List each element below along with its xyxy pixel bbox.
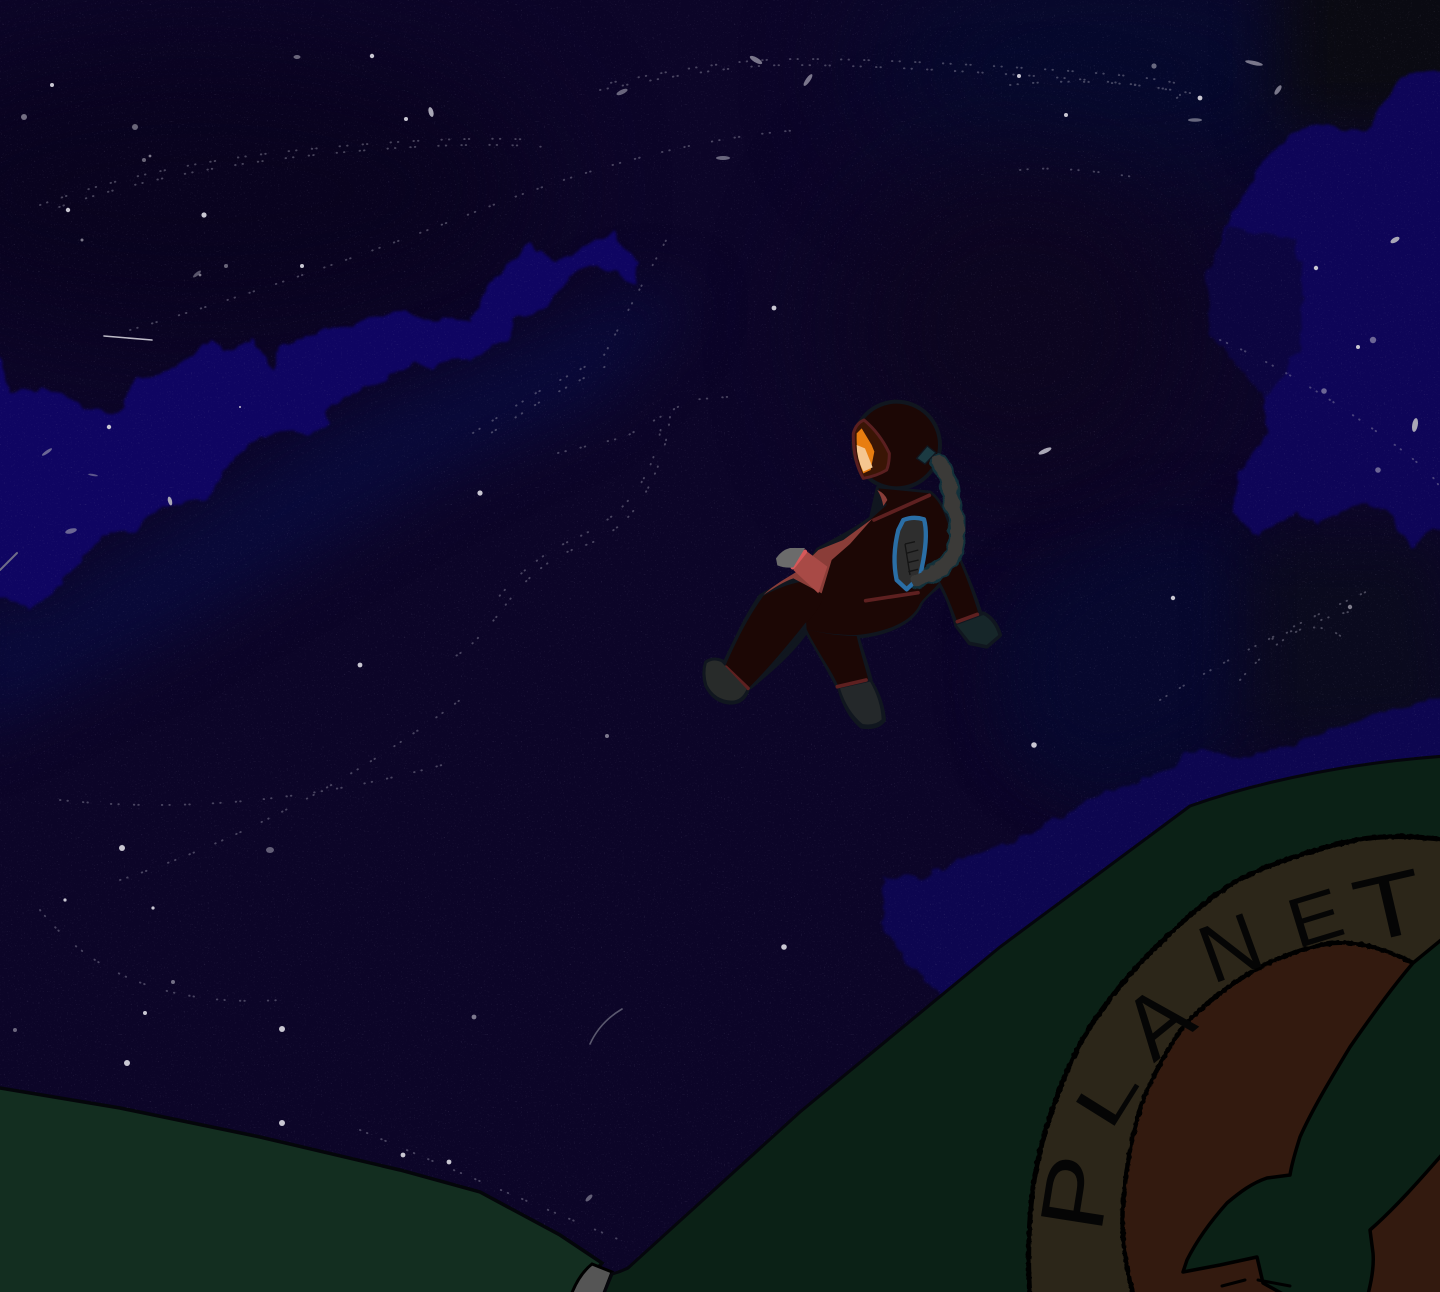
planet sign: lettering PLANET: L	[1059, 1052, 1153, 1141]
nebula band: lower right behind planet	[880, 690, 1440, 1010]
planet sign: lettering PLANET: A	[1103, 964, 1212, 1078]
astronaut: sunlit pink edge of thigh and chest	[763, 518, 873, 595]
astronaut: right glove	[957, 615, 998, 645]
planet sign: continent marks	[1222, 1280, 1290, 1286]
astronaut: hose core	[917, 462, 957, 581]
astronaut: backpack	[895, 518, 926, 589]
astronaut: forearm	[793, 550, 827, 593]
astronaut: front leg	[725, 582, 823, 688]
astronaut: red suit trim	[726, 495, 977, 688]
planet: signpost pole	[570, 1264, 612, 1292]
astronaut: outlined silhouette	[705, 402, 999, 727]
nebula band: milky way on the left	[0, 233, 638, 610]
planet sign: lettering PLANET: N	[1187, 896, 1274, 1001]
astronaut: rear leg	[807, 629, 868, 686]
astronaut: gloved hand	[776, 548, 805, 568]
planet sign: green continent	[1183, 936, 1440, 1292]
nebula cloud: navy patch at right	[1010, 523, 1260, 790]
astronaut: visor	[853, 420, 889, 478]
astronaut: rear boot	[840, 682, 882, 724]
nebula cloud: upper right	[1207, 73, 1440, 549]
planet sign: brown disc	[1122, 943, 1440, 1292]
shooting stars	[0, 336, 622, 1044]
planet sign: lettering PLANET: T	[1344, 849, 1434, 963]
planet sign: lettering PLANET: P	[1020, 1148, 1132, 1238]
astronaut: air hose outline	[917, 462, 957, 581]
astronaut	[705, 402, 999, 727]
astronaut: torso and rear arm	[803, 488, 979, 635]
nebula cloud: dark patch at lower right	[1250, 540, 1440, 750]
planet sign: lettering PLANET: E	[1278, 873, 1352, 963]
astronaut: helmet	[855, 404, 938, 486]
planet sign: ring	[1029, 837, 1440, 1292]
nebula: dark navy shadow under the milky way	[0, 290, 690, 740]
astronaut: helmet hose collar	[917, 446, 936, 464]
sky shading: dark and navy smudges	[0, 0, 1440, 790]
astronaut: wrist cuff	[793, 552, 805, 567]
planet: left mound	[0, 1087, 602, 1292]
astronaut: neck collar	[877, 490, 887, 506]
astronaut: front boot	[705, 661, 747, 701]
planet: right mound	[602, 756, 1440, 1292]
planet sign: lettering PLANET	[1020, 849, 1434, 1238]
